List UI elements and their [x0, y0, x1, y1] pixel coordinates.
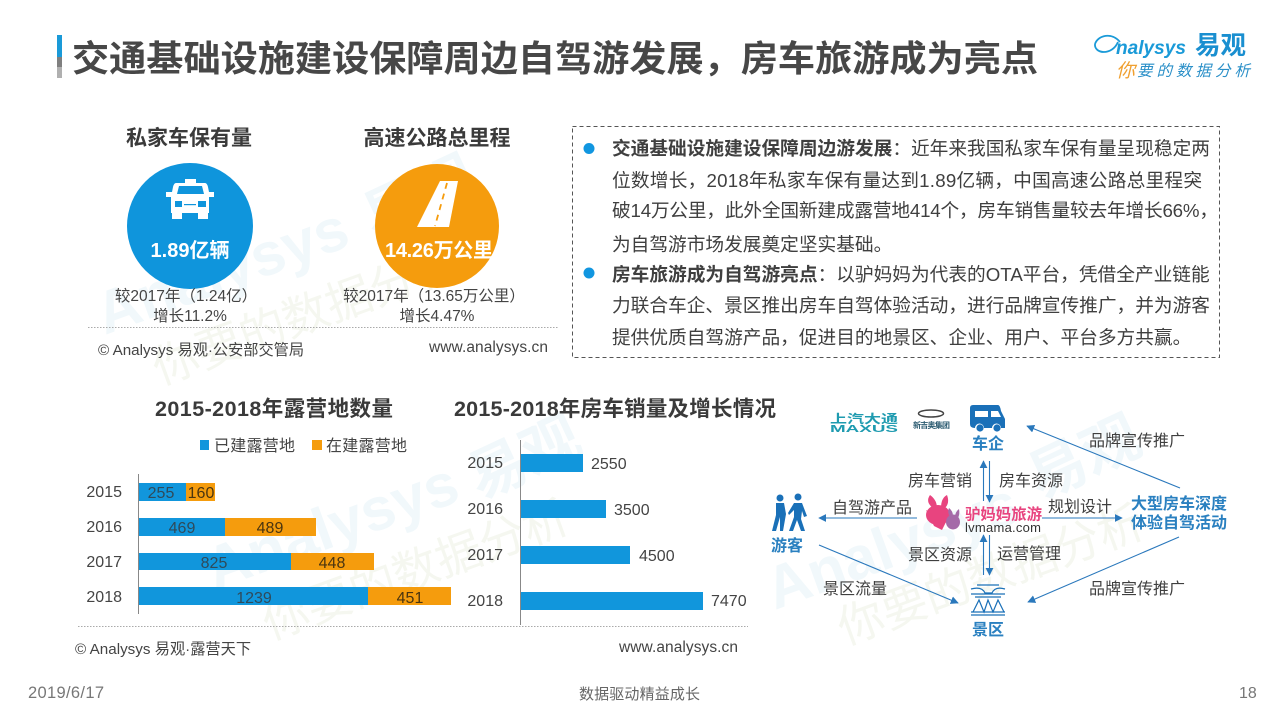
value labels: 3500 — [614, 502, 650, 519]
footer: page number: 18 — [1239, 685, 1257, 702]
logo: Analysys: 你 — [1116, 61, 1138, 82]
label: large RV event — [1131, 494, 1227, 532]
value labels: 825 — [201, 555, 227, 572]
watermark — [87, 144, 1151, 654]
legend: 在建露营地 — [326, 437, 407, 455]
value: 1.89亿辆: 1.89亿辆 — [151, 239, 229, 262]
value labels: 7470 — [711, 593, 747, 610]
panel: highway mileage — [343, 126, 525, 325]
value labels — [591, 456, 747, 610]
bars — [521, 454, 703, 610]
text block: infrastructure: 为自驾游市场发展奠定坚实基础。 — [612, 234, 892, 255]
icon: tourists — [772, 494, 807, 531]
logo: Analysys: 易观 — [1195, 32, 1246, 60]
value labels: 160 — [188, 485, 214, 502]
value labels: 469 — [169, 520, 195, 537]
label: tourists: 游客 — [771, 536, 803, 555]
text block: RV tourism: 提供优质自驾游产品，促进目的地景区、企业、用户、平台多方共赢。 — [612, 327, 1191, 348]
value: 14.26万公里: 14.26万公里 — [385, 240, 493, 262]
source: bottom left: © Analysys 易观·露营天下 — [75, 641, 251, 658]
note: highways — [343, 287, 525, 325]
circle: private cars — [127, 163, 253, 289]
text block: RV tourism: 力联合车企、景区推出房车自驾体验活动，进行品牌宣传推广，并为游客 — [612, 295, 1210, 316]
title accent bar — [57, 35, 62, 78]
footer: date: 2019/6/17 — [28, 684, 104, 702]
value labels: 448 — [319, 555, 345, 572]
bars — [139, 483, 451, 605]
heading: campsites: 2015-2018年露营地数量 — [155, 397, 393, 421]
label: car makers: 车企 — [972, 434, 1004, 453]
arrow labels: 品牌宣传推广 — [1089, 432, 1185, 450]
text block: RV tourism — [612, 264, 1210, 348]
logo: lvmama: lvmama.com — [965, 520, 1041, 535]
text block: infrastructure: 交通基础设施建设保障周边游发展：近年来我国私家车保有量呈现稳定两 — [612, 138, 1210, 159]
logo: lvmama — [926, 495, 1042, 535]
logo: Analysys: nalysys — [1116, 38, 1186, 59]
year labels — [86, 484, 122, 606]
value labels: 255 — [148, 485, 174, 502]
value labels: 451 — [397, 590, 423, 607]
value labels: 489 — [257, 520, 283, 537]
logo: MAXUS — [830, 411, 898, 435]
arrow labels: 自驾游产品 — [832, 499, 912, 517]
note: private cars: 增长11.2% — [153, 307, 227, 325]
logo: Analysys — [1095, 32, 1251, 82]
arrow labels: 品牌宣传推广 — [1089, 580, 1185, 598]
heading: RV sales: 2015-2018年房车销量及增长情况 — [454, 397, 776, 421]
label: large RV event: 大型房车深度 — [1131, 494, 1227, 513]
chart: campsites — [86, 397, 451, 614]
value labels: 4500 — [639, 548, 675, 565]
panel: private car ownership — [115, 126, 257, 325]
watermark: 你要的数据分析 — [146, 235, 466, 394]
source: top left: © Analysys 易观·公安部交管局 — [98, 341, 304, 359]
year labels: 2015 — [86, 484, 122, 501]
logo: MAXUS: MAXUS — [830, 423, 898, 435]
circle: highways — [375, 164, 499, 288]
website: bottom: www.analysys.cn — [618, 639, 738, 656]
icon: RV — [970, 405, 1005, 432]
logo: MAXUS: 上汽大通 — [830, 411, 898, 426]
watermark: Analysys — [87, 194, 357, 347]
arrow labels: 房车资源 — [999, 472, 1063, 490]
year labels: 2018 — [86, 589, 122, 606]
diagram: RV ecosystem — [771, 405, 1227, 639]
arrow labels: 房车营销 — [908, 472, 972, 490]
bullet — [584, 268, 594, 278]
label: scenic area: 景区 — [972, 621, 1004, 639]
panel: key points — [572, 126, 1220, 358]
arrow labels — [823, 432, 1185, 598]
website: top left: www.analysys.cn — [428, 339, 548, 356]
note: private cars — [115, 287, 257, 325]
watermark: Analysys — [197, 449, 467, 602]
icon: road — [417, 181, 458, 227]
legend: 已建露营地 — [214, 437, 295, 455]
arrow labels: 规划设计 — [1048, 498, 1112, 516]
value labels: 2550 — [591, 456, 627, 473]
year labels — [467, 455, 503, 610]
logo: New Gonow: 新吉奥集团 — [913, 420, 950, 430]
watermark: Analysys — [757, 469, 1027, 622]
watermark: 你要的数据分析 — [831, 495, 1151, 654]
value labels — [148, 485, 423, 607]
text block: infrastructure: 位数增长，2018年私家车保有量达到1.89亿辆，中国高速公路总里程突 — [612, 170, 1202, 191]
year labels: 2015 — [467, 455, 503, 472]
icon: scenic area — [971, 585, 1005, 615]
title: 交通基础设施建设保障周边自驾游发展，房车旅游成为亮点 — [72, 39, 1038, 79]
footer: slogan: 数据驱动精益成长 — [579, 686, 700, 703]
year labels: 2017 — [467, 547, 503, 564]
note: highways: 增长4.47% — [400, 307, 475, 325]
bullet — [584, 143, 594, 154]
text block: infrastructure: 破14万公里，此外全国新建成露营地414个，房车销售量较去年增长66%， — [612, 200, 1218, 221]
year labels: 2016 — [467, 501, 503, 518]
note: highways: 较2017年（13.65万公里） — [343, 287, 525, 305]
note: private cars: 较2017年（1.24亿） — [115, 287, 257, 305]
label: large RV event: 体验自驾活动 — [1131, 513, 1227, 532]
arrow labels: 景区资源 — [908, 546, 972, 564]
year labels: 2018 — [467, 593, 503, 610]
arrow labels: 景区流量 — [823, 580, 887, 598]
year labels: 2016 — [86, 519, 122, 536]
logo: New Gonow — [913, 410, 950, 430]
watermark: 易观 — [1018, 404, 1151, 512]
text block: infrastructure — [612, 138, 1218, 255]
logo: Analysys: 要的数据分析 — [1137, 62, 1251, 80]
text block: RV tourism: 房车旅游成为自驾游亮点：以驴妈妈为代表的OTA平台，凭借全产业链能 — [612, 264, 1210, 285]
value labels: 1239 — [236, 590, 272, 607]
icon: taxi — [166, 179, 214, 219]
legend — [200, 437, 407, 455]
year labels: 2017 — [86, 554, 122, 571]
logo: lvmama: 驴妈妈旅游 — [965, 504, 1042, 524]
heading: highways: 高速公路总里程 — [364, 126, 510, 150]
watermark: 你要的数据分析 — [256, 490, 576, 649]
chart: RV sales — [454, 397, 776, 625]
heading: private cars: 私家车保有量 — [126, 126, 252, 150]
watermark: 易观 — [458, 404, 591, 512]
arrow labels: 运营管理 — [997, 545, 1061, 563]
watermark: 易观 — [353, 144, 486, 252]
